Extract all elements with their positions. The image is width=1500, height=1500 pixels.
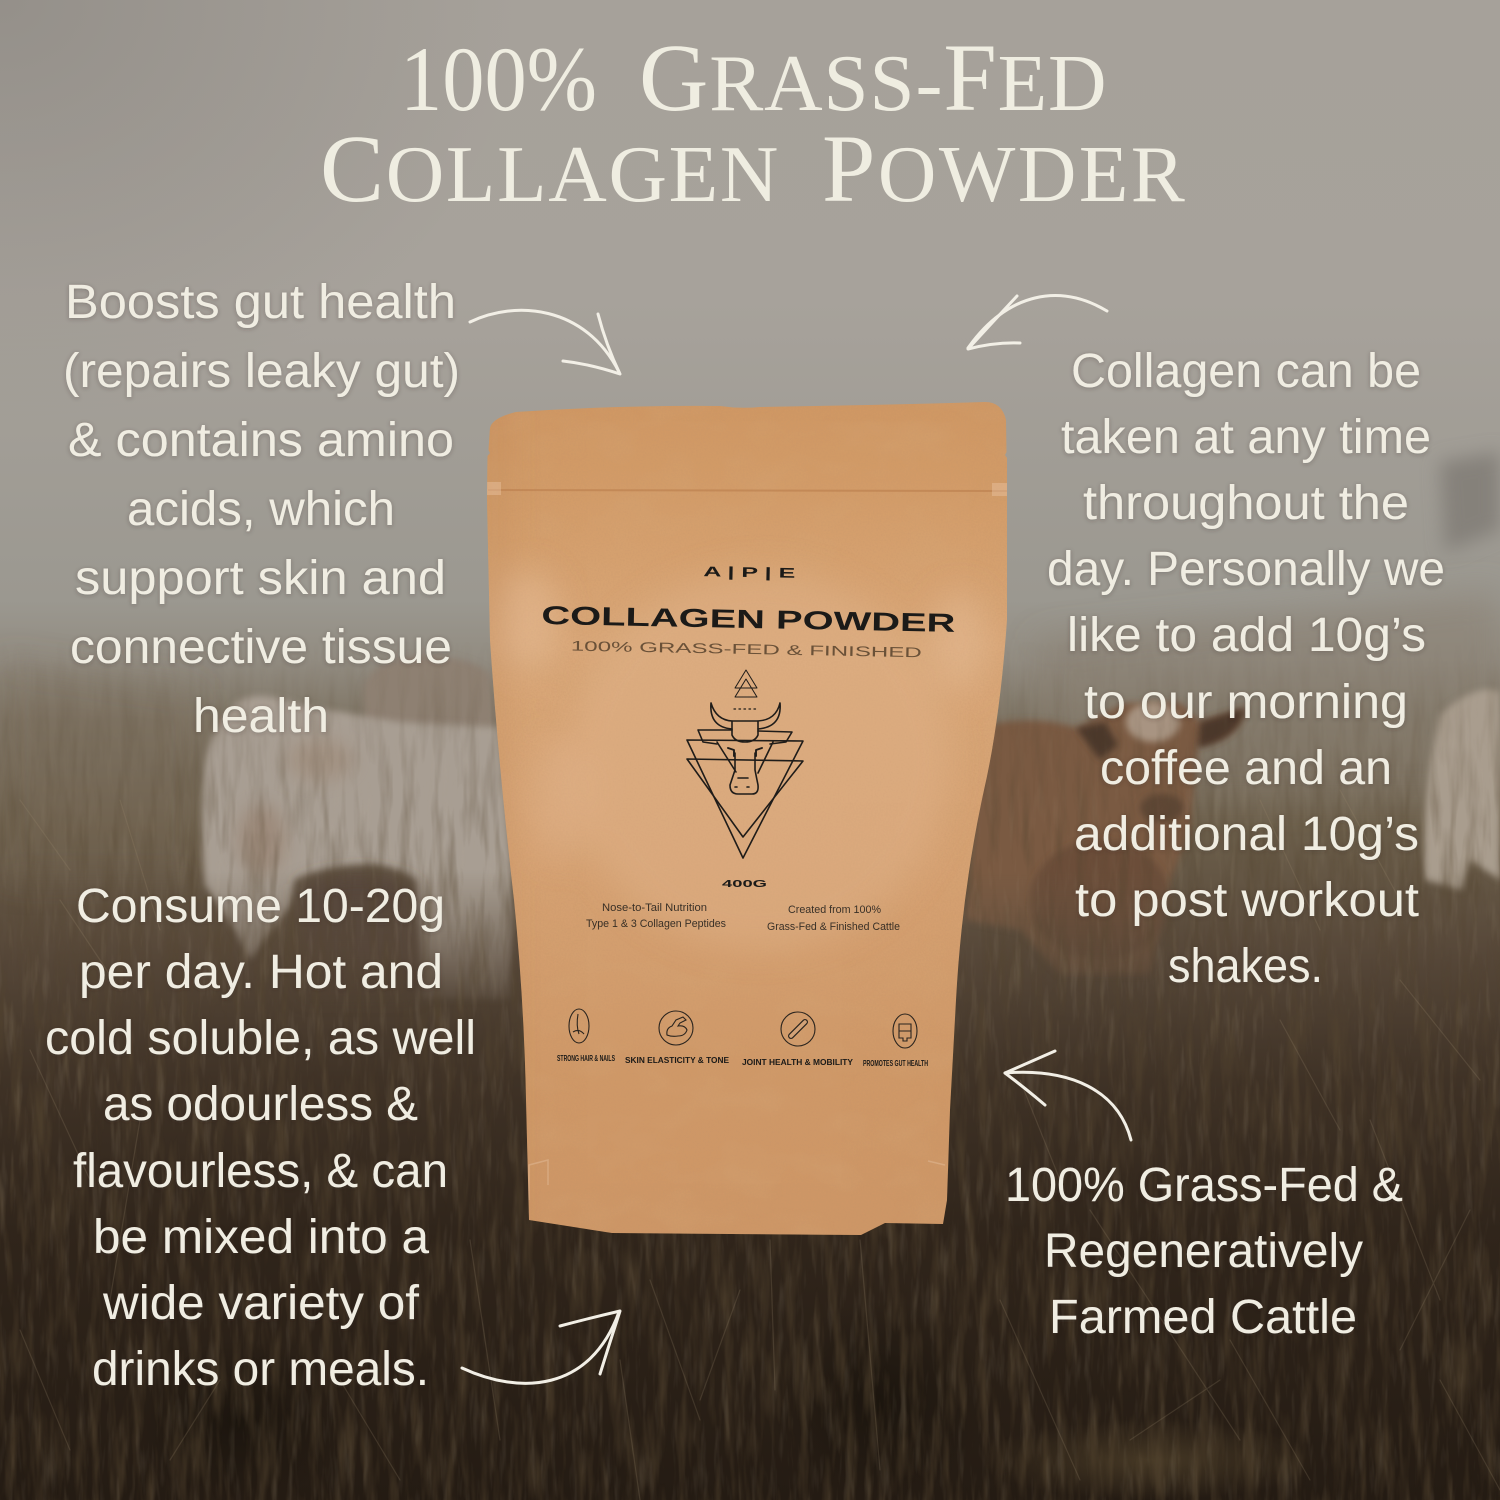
text block: dosage and solubility: wide variety of — [102, 1277, 420, 1330]
cow patches: left — [238, 738, 354, 876]
pouch claims: Grass-Fed & Finished Cattle — [767, 921, 900, 933]
text block: dosage and solubility: as odourless & — [103, 1078, 418, 1131]
text block: dosage and solubility: be mixed into a — [93, 1211, 429, 1264]
icon: muscle — [625, 1011, 730, 1065]
text block: when to take collagen: to post workout — [1075, 874, 1419, 927]
text block: gut health benefits: support skin and — [75, 552, 446, 605]
bull logo — [687, 670, 803, 858]
title: POWDER — [822, 115, 1187, 222]
product name: COLLAGEN POWDER — [541, 600, 956, 638]
text block: dosage and solubility: per day. Hot and — [79, 946, 443, 999]
icon: gut — [863, 1014, 928, 1068]
text block: sourcing: Regeneratively — [1044, 1225, 1363, 1278]
pouch benefit icons — [557, 1009, 928, 1068]
arrow: timing to pouch — [968, 296, 1107, 349]
pouch claims: Type 1 & 3 Collagen Peptides — [586, 918, 726, 930]
text block: gut health benefits: connective tissue — [70, 621, 452, 674]
icon: bone: JOINT HEALTH & MOBILITY — [742, 1058, 854, 1067]
text block: when to take collagen: throughout the — [1083, 477, 1409, 530]
title — [320, 24, 1187, 222]
product pouch — [480, 395, 1020, 1245]
text block: dosage and solubility — [45, 880, 476, 1396]
text block: when to take collagen: coffee and an — [1100, 742, 1392, 795]
cow: brown, right — [965, 703, 1245, 975]
subtitle: 100% GRASS-FED & FINISHED — [571, 638, 922, 660]
text block: gut health benefits: health — [193, 690, 329, 743]
cow underside: left — [290, 862, 425, 962]
text block: gut health benefits: (repairs leaky gut) — [63, 345, 460, 398]
text block: gut health benefits — [63, 276, 460, 743]
cow: white, left — [202, 696, 512, 1000]
pouch label text — [541, 560, 957, 661]
icon: muscle: SKIN ELASTICITY & TONE — [625, 1056, 730, 1065]
icon: bone — [742, 1012, 854, 1067]
cow head details: right — [1030, 702, 1245, 960]
pouch claims: Created from 100% — [788, 904, 881, 916]
text block: sourcing — [1005, 1159, 1403, 1344]
brand mark: A | P | E — [703, 563, 795, 581]
title: COLLAGEN — [320, 115, 780, 222]
text block: dosage and solubility: drinks or meals. — [92, 1343, 429, 1396]
text block: when to take collagen: day. Personally we — [1047, 543, 1445, 596]
pouch body — [480, 395, 1020, 1245]
text block: when to take collagen: to our morning — [1084, 676, 1408, 729]
net weight: 400G — [722, 879, 767, 890]
text block: sourcing: 100% Grass-Fed & — [1005, 1159, 1403, 1212]
cow: white, far right — [1424, 690, 1500, 890]
text block: when to take collagen — [1047, 345, 1445, 993]
text block: when to take collagen: shakes. — [1168, 940, 1323, 993]
title: GRASS-FED — [639, 24, 1107, 131]
text block: when to take collagen: additional 10g’s — [1074, 808, 1419, 861]
arrow: sourcing to pouch — [1005, 1051, 1131, 1140]
text block: sourcing: Farmed Cattle — [1049, 1291, 1357, 1344]
text block: gut health benefits: Boosts gut health — [65, 276, 456, 329]
arrow: dosage to pouch — [462, 1311, 620, 1383]
text block: gut health benefits: acids, which — [127, 483, 395, 536]
text block: dosage and solubility: flavourless, & can — [73, 1145, 448, 1198]
text block: dosage and solubility: Consume 10-20g — [76, 880, 445, 933]
cow: distant, left — [363, 656, 495, 730]
text block: gut health benefits: & contains amino — [68, 414, 454, 467]
icon: hair and nails — [557, 1009, 615, 1063]
title: 100% — [400, 28, 597, 130]
text block: when to take collagen: taken at any time — [1061, 411, 1431, 464]
cow: distant, far right — [1440, 452, 1500, 552]
pouch claims — [586, 902, 900, 933]
icon: gut: PROMOTES GUT HEALTH — [863, 1059, 928, 1068]
text block: when to take collagen: like to add 10g’s — [1067, 609, 1426, 662]
text block: when to take collagen: Collagen can be — [1071, 345, 1421, 398]
icon: hair and nails: STRONG HAIR & NAILS — [557, 1054, 615, 1063]
text block: dosage and solubility: cold soluble, as well — [45, 1012, 476, 1065]
pouch claims: Nose-to-Tail Nutrition — [602, 902, 707, 914]
arrow: gut health to pouch — [470, 310, 620, 374]
